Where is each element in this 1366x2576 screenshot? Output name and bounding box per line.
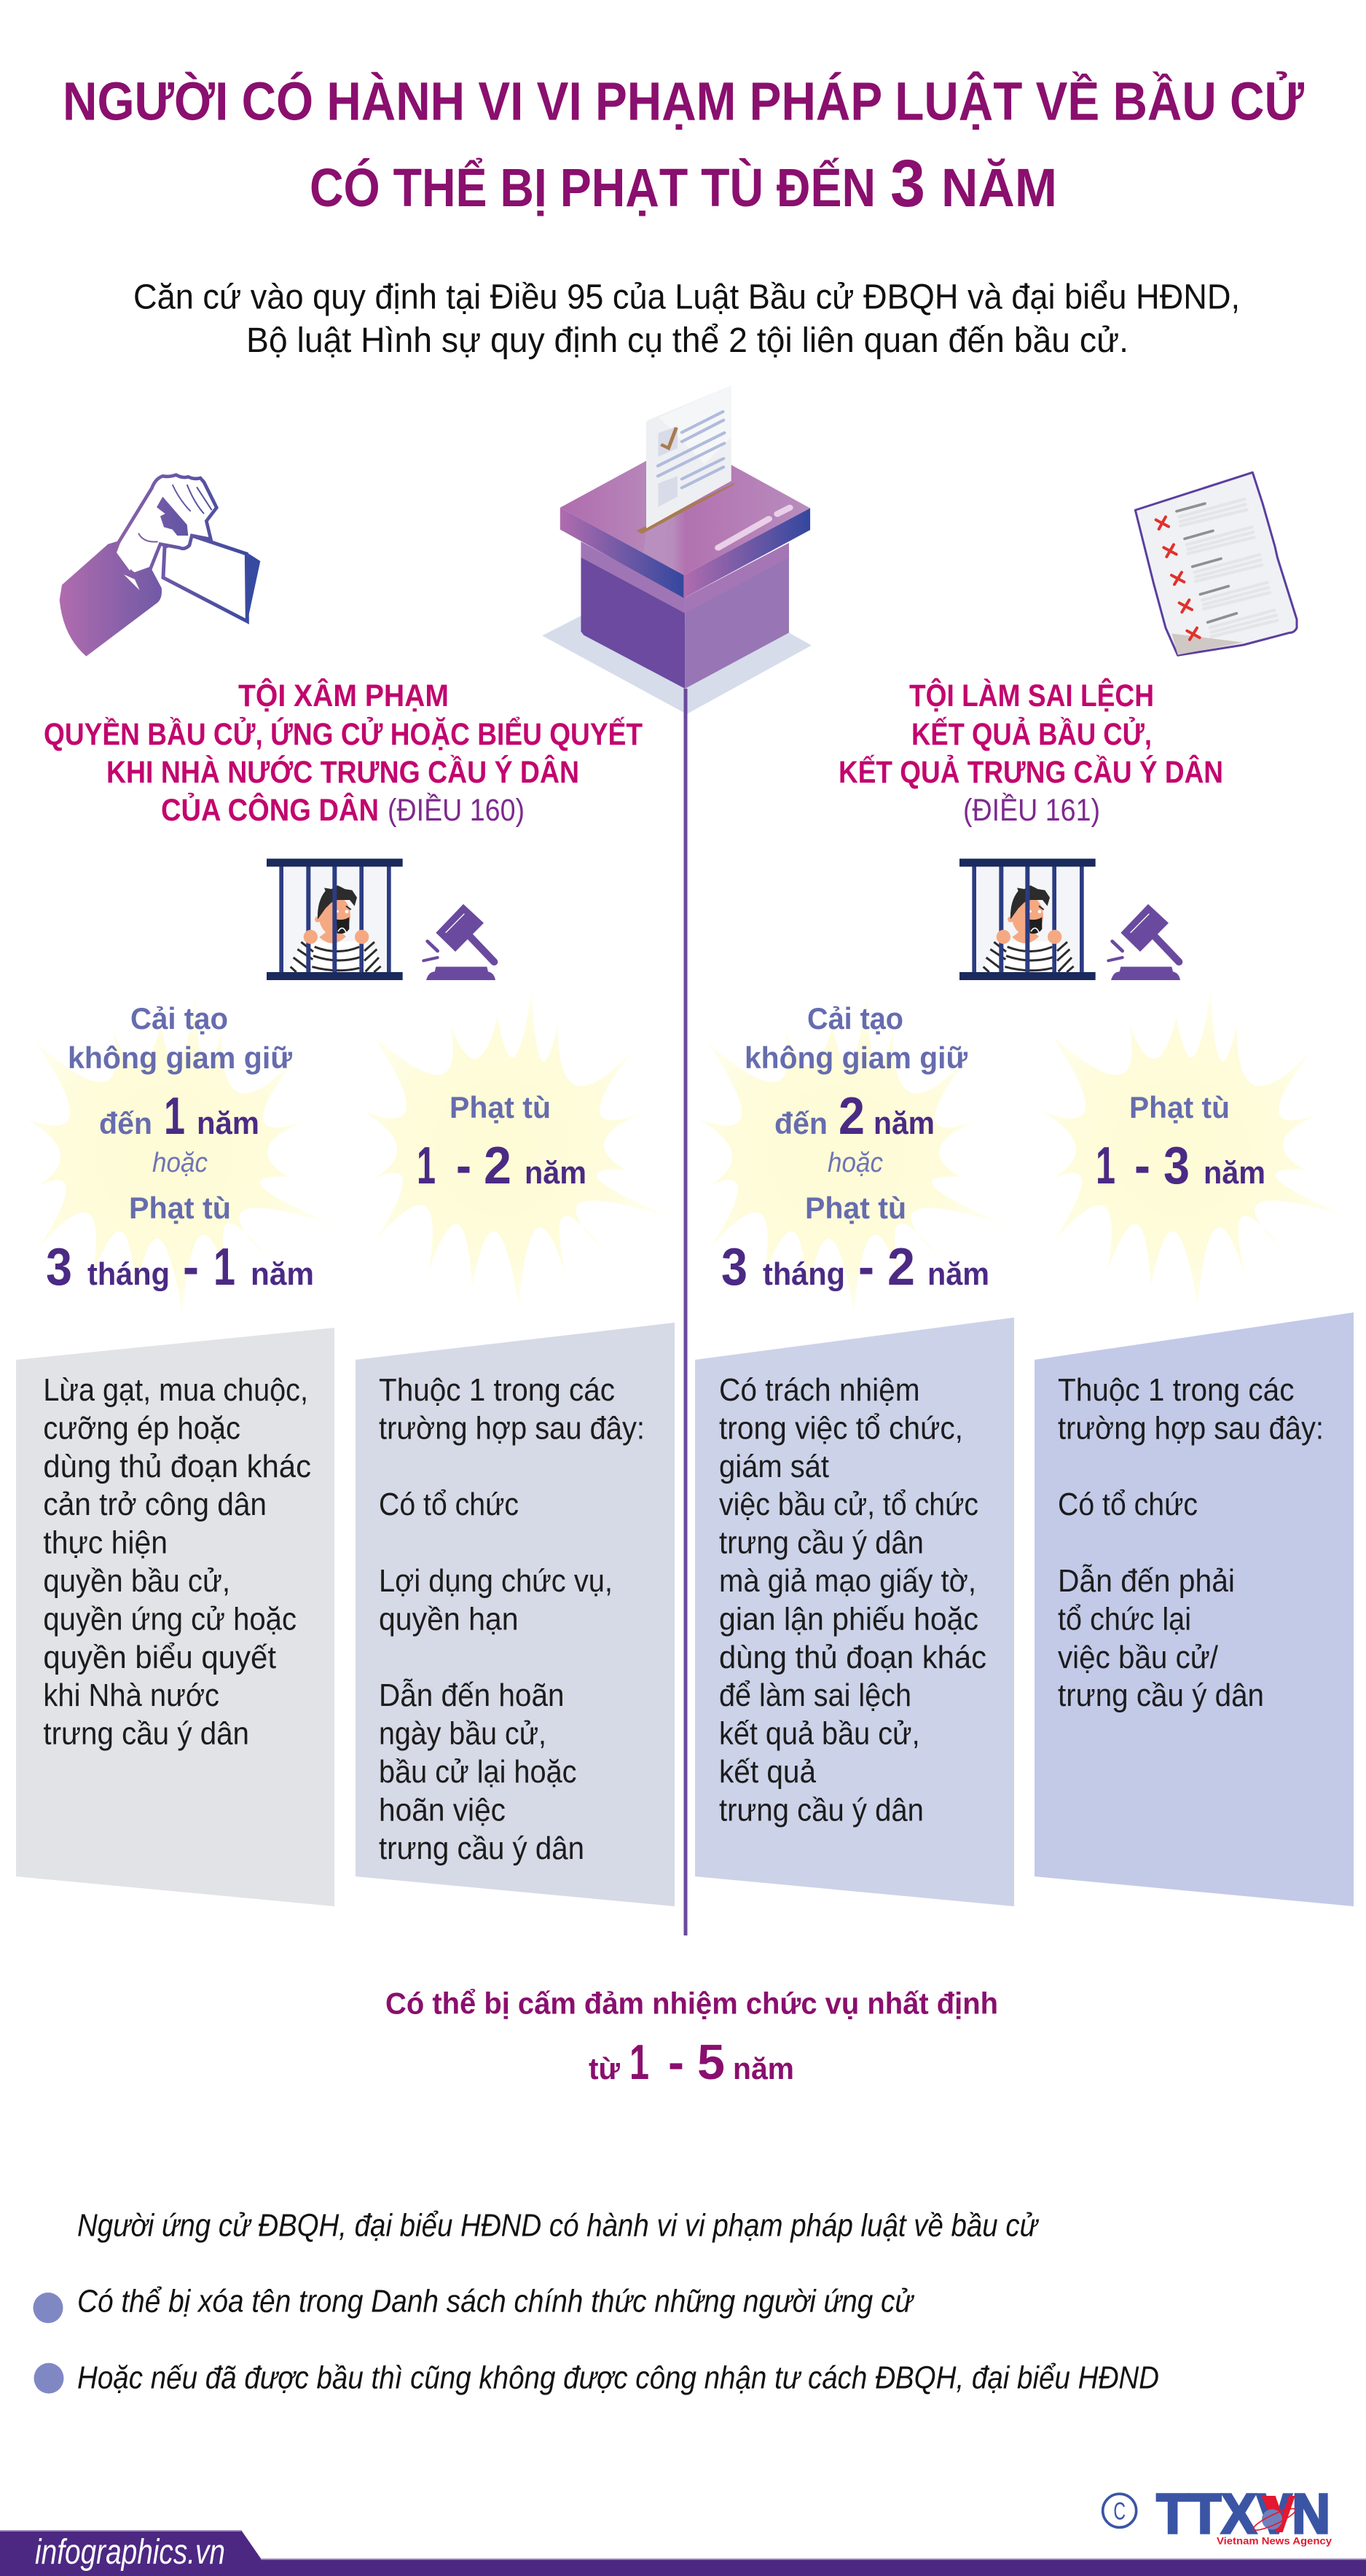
logo: TTXVN: TTXVN [1156, 2483, 1330, 2545]
intro text [133, 278, 1240, 360]
penalty text column 3: 2 [839, 1087, 865, 1146]
panel: periwinkle description: Có trách nhiệm [719, 1372, 920, 1408]
penalty text column 1: 1 [164, 1087, 185, 1146]
penalty text column 1: Phạt tù [129, 1191, 231, 1225]
heading: offence article 160: KHI NHÀ NƯỚC TRƯNG CẦU Ý DÂN [106, 754, 579, 790]
panel: grey description: quyền bầu cử, [43, 1563, 230, 1599]
penalty text column 2: năm [525, 1155, 586, 1191]
bullet 1: Có thể bị xóa tên trong Danh sách chính thức những người ứng cử [77, 2284, 915, 2319]
icon: prisoner behind bars left [267, 858, 403, 980]
panel: grey description: cản trở công dân [43, 1487, 267, 1522]
heading: offence article 161: TỘI LÀM SAI LỆCH [909, 678, 1154, 713]
panel: periwinkle description: trưng cầu ý dân [719, 1792, 924, 1828]
penalty text column 3: năm [874, 1105, 935, 1141]
panel: light lavender description: Thuộc 1 trong các [379, 1372, 615, 1408]
callout: ban from holding office: Có thể bị cấm đảm nhiệm chức vụ nhất định [385, 1986, 998, 2021]
penalty text column 4 [1096, 1090, 1265, 1195]
panel: blue description: tổ chức lại [1058, 1601, 1191, 1637]
panel: periwinkle description: dùng thủ đoạn khác [719, 1640, 986, 1675]
panel: light lavender description: bầu cử lại hoặc [379, 1754, 577, 1790]
icon: ballot box [542, 385, 812, 714]
heading: offence article 160: CỦA CÔNG DÂN [161, 792, 379, 828]
panel: light lavender description: Dẫn đến hoãn [379, 1677, 564, 1713]
panel: blue description: việc bầu cử/ [1058, 1640, 1219, 1675]
panel: grey description: thực hiện [43, 1525, 168, 1561]
penalty text column 3: 2 [887, 1238, 915, 1296]
penalty text column 1: 3 [46, 1238, 72, 1296]
penalty text column 3: Phạt tù [805, 1191, 906, 1225]
center divider line [683, 689, 688, 1935]
starburst 4 [1042, 990, 1354, 1306]
panel: blue description: Thuộc 1 trong các [1058, 1372, 1294, 1408]
panel: light lavender description: ngày bầu cử, [379, 1716, 546, 1752]
title: NĂM [941, 157, 1057, 218]
penalty text column 1: 1 [213, 1238, 235, 1296]
note heading: Người ứng cử ĐBQH, đại biểu HĐND có hành vi vi phạm pháp luật về bầu cử [77, 2208, 1040, 2243]
penalty text column 1: hoặc [152, 1148, 208, 1178]
panel: light lavender description [356, 1323, 675, 1906]
icon: hand casting ballot [60, 475, 260, 657]
callout: ban from holding office: từ [589, 2051, 621, 2086]
panel: blue description: trường hợp sau đây: [1058, 1410, 1324, 1446]
penalty text column 2: 1 [417, 1137, 436, 1195]
footer bar: infographics.vn [35, 2533, 225, 2572]
heading: offence article 161: (ĐIỀU 161) [963, 793, 1100, 828]
penalty text column 4: 3 [1163, 1137, 1190, 1195]
callout: ban from holding office: năm [733, 2051, 794, 2086]
penalty text column 2: Phạt tù [450, 1090, 551, 1124]
panel: light lavender description: trưng cầu ý dân [379, 1831, 584, 1866]
penalty text column 3 [721, 1001, 989, 1296]
starburst 2 [363, 990, 675, 1306]
penalty text column 1: - [183, 1238, 199, 1296]
logo: TTXVN: C [1113, 2497, 1126, 2525]
panel: blue description: Có tổ chức [1058, 1487, 1198, 1522]
penalty text column 1: không giam giữ [68, 1041, 293, 1075]
callout: ban from holding office [385, 1986, 998, 2090]
panel: periwinkle description: việc bầu cử, tổ chức [719, 1487, 978, 1522]
panel: periwinkle description [695, 1318, 1014, 1906]
panel: grey description: dùng thủ đoạn khác [43, 1449, 311, 1484]
panel: blue description: trưng cầu ý dân [1058, 1677, 1264, 1713]
penalty text column 3: hoặc [828, 1148, 883, 1178]
panel: light lavender description: trường hợp sau đây: [379, 1410, 645, 1446]
logo: TTXVN: Vietnam News Agency [1217, 2535, 1332, 2547]
intro text: Căn cứ vào quy định tại Điều 95 của Luật Bầu cử ĐBQH và đại biểu HĐND, [133, 278, 1240, 316]
icon: gavel right [1108, 904, 1180, 980]
penalty text column 4: Phạt tù [1129, 1090, 1230, 1124]
heading: offence article 161 [839, 678, 1223, 828]
panel: periwinkle description: để làm sai lệch [719, 1677, 911, 1713]
penalty text column 3: tháng [763, 1256, 845, 1292]
intro text: Bộ luật Hình sự quy định cụ thể 2 tội liên quan đến bầu cử. [246, 321, 1128, 360]
penalty text column 2: 2 [484, 1137, 511, 1195]
panel: grey description [16, 1328, 334, 1906]
icon: gavel left [423, 904, 495, 980]
penalty text column 4: năm [1204, 1155, 1265, 1191]
heading: offence article 161: KẾT QUẢ TRƯNG CẦU Ý DÂN [839, 754, 1223, 790]
panel: periwinkle description: gian lận phiếu hoặc [719, 1601, 978, 1637]
panel: periwinkle description: trong việc tổ chức, [719, 1410, 963, 1446]
bullet 2: Hoặc nếu đã được bầu thì cũng không được công nhận tư cách ĐBQH, đại biểu HĐND [77, 2360, 1159, 2396]
panel: periwinkle description: trưng cầu ý dân [719, 1525, 924, 1561]
panel: light lavender description: Có tổ chức [379, 1487, 519, 1522]
penalty text column 1: năm [197, 1105, 259, 1141]
heading: offence article 160: (ĐIỀU 160) [388, 793, 525, 828]
title: 3 [890, 146, 925, 221]
starburst 1 [26, 997, 339, 1313]
starburst 3 [698, 997, 1010, 1313]
penalty text column 4: - [1134, 1137, 1150, 1195]
penalty text column 3: - [858, 1238, 874, 1296]
callout: ban from holding office: 5 [697, 2035, 725, 2090]
title [63, 71, 1305, 221]
penalty text column 3: năm [927, 1256, 989, 1292]
penalty text column 1: đến [99, 1106, 152, 1140]
callout: ban from holding office: 1 [629, 2035, 649, 2090]
heading: offence article 160: TỘI XÂM PHẠM [238, 678, 449, 713]
panel: periwinkle description: giám sát [719, 1449, 829, 1484]
panel: grey description: Lừa gạt, mua chuộc, [43, 1372, 308, 1408]
icon: prisoner behind bars right [959, 858, 1096, 980]
penalty text column 2 [417, 1090, 586, 1195]
title: CÓ THỂ BỊ PHẠT TÙ ĐẾN [310, 157, 876, 218]
panel: grey description: khi Nhà nước [43, 1677, 219, 1713]
heading: offence article 160 [44, 678, 643, 828]
penalty text column 1: năm [251, 1256, 314, 1292]
panel: light lavender description: hoãn việc [379, 1792, 506, 1828]
panel: blue description [1035, 1312, 1354, 1906]
penalty text column 1: Cải tạo [130, 1001, 228, 1036]
panel: light lavender description: Lợi dụng chức vụ, [379, 1563, 613, 1599]
footer bar [0, 2530, 1366, 2576]
penalty text column 2: - [456, 1137, 471, 1195]
panel: grey description: quyền biểu quyết [43, 1640, 276, 1675]
panel: grey description: cưỡng ép hoặc [43, 1410, 240, 1446]
penalty text column 3: không giam giữ [745, 1041, 968, 1075]
penalty text column 3: 3 [721, 1238, 747, 1296]
icon: ballot paper with red crosses [1135, 472, 1297, 655]
penalty text column 3: Cải tạo [807, 1001, 903, 1036]
callout: ban from holding office: - [668, 2035, 684, 2090]
panel: grey description: trưng cầu ý dân [43, 1716, 249, 1752]
penalty text column 1 [46, 1001, 314, 1296]
panel: periwinkle description: kết quả [719, 1754, 816, 1790]
heading: offence article 160: QUYỀN BẦU CỬ, ỨNG CỬ HOẶC BIỂU QUYẾT [44, 716, 643, 752]
heading: offence article 161: KẾT QUẢ BẦU CỬ, [911, 716, 1152, 752]
panel: periwinkle description: mà giả mạo giấy tờ, [719, 1563, 976, 1599]
panel: periwinkle description: kết quả bầu cử, [719, 1716, 920, 1752]
panel: grey description: quyền ứng cử hoặc [43, 1601, 297, 1637]
panel: light lavender description: quyền hạn [379, 1601, 519, 1637]
penalty text column 1: tháng [87, 1256, 170, 1292]
penalty text column 4: 1 [1096, 1137, 1115, 1195]
panel: blue description: Dẫn đến phải [1058, 1563, 1235, 1599]
penalty text column 3: đến [774, 1106, 828, 1140]
